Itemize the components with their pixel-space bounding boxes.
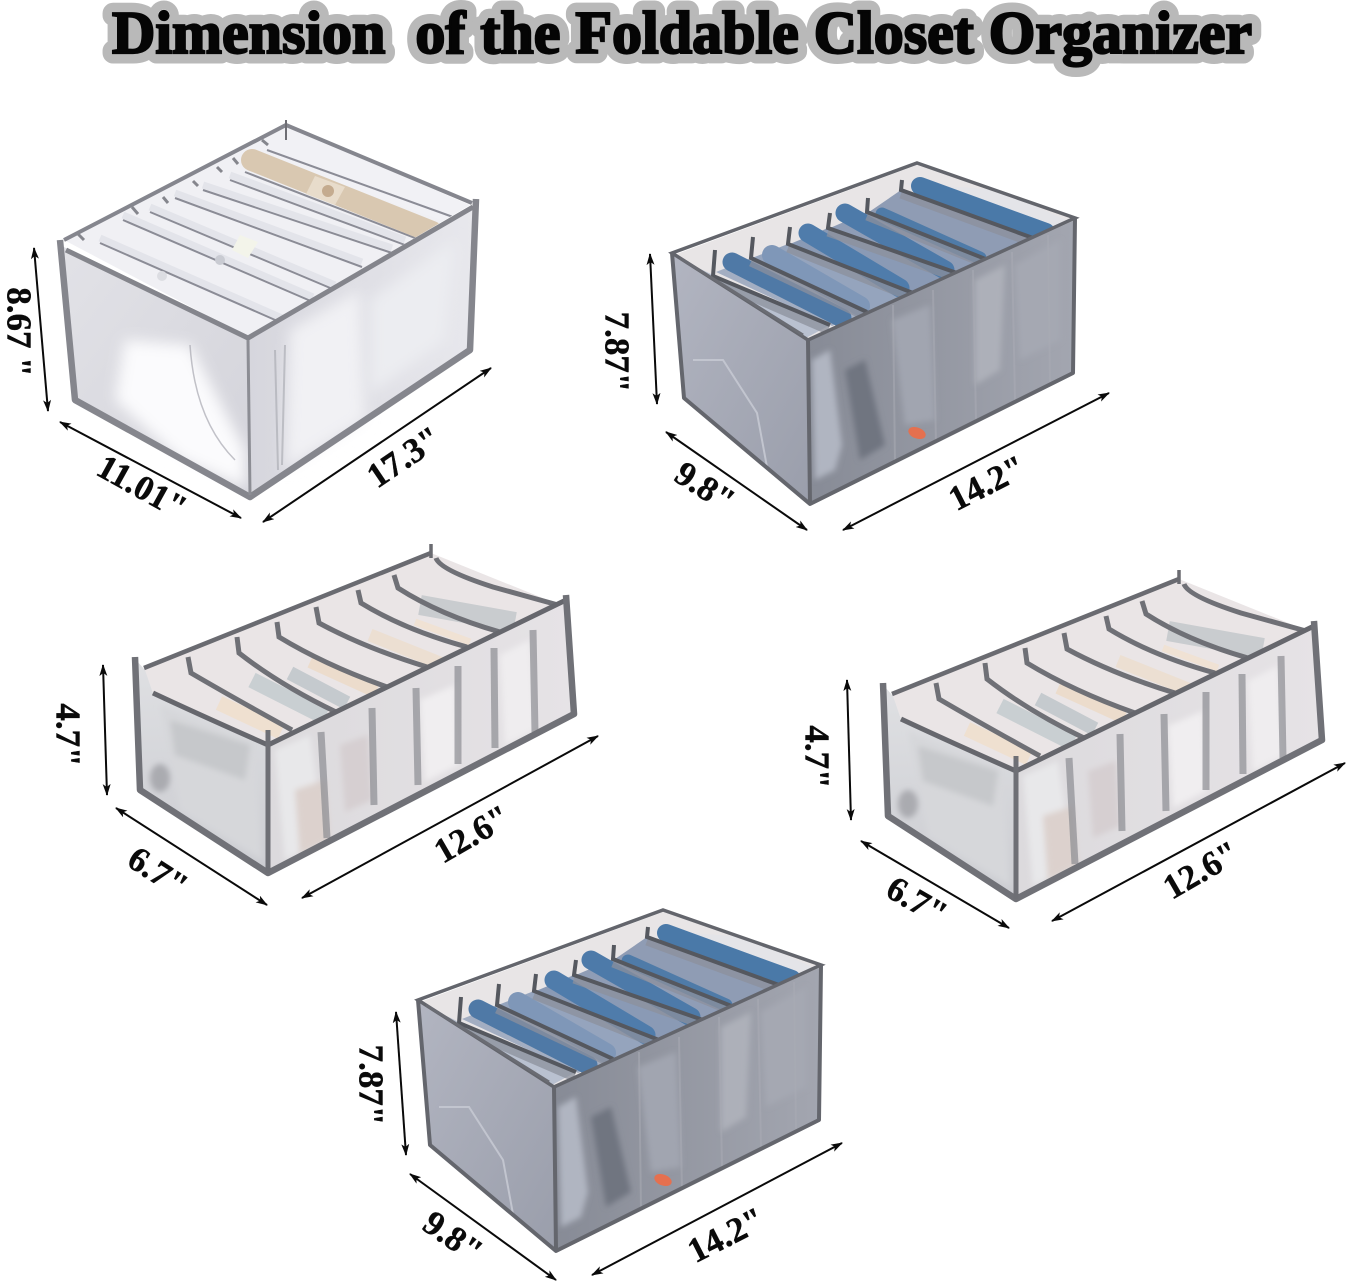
label: 12.6 inches: 12.6": [427, 797, 517, 871]
organizer illustration: folded underwear: [135, 544, 574, 873]
label: 6.7 inches: 6.7": [121, 838, 195, 906]
organizer illustration: white shirts: [60, 120, 476, 497]
arrow: length: [592, 1143, 842, 1275]
title: Dimension of the Foldable Closet Organizer: [112, 0, 1252, 66]
arrow: width: [410, 1174, 556, 1280]
shirt buttons and tags: [77, 140, 334, 281]
arrow: height: [34, 248, 48, 411]
label: 11.01 inches: 11.01": [90, 447, 194, 527]
label: 17.3 inches: 17.3": [360, 418, 448, 496]
panel: low organizer middle right: [798, 570, 1345, 934]
arrow: height: [650, 254, 657, 404]
arrow: width: [60, 422, 241, 518]
arrow: width: [861, 841, 1009, 928]
arrow: height: [103, 665, 107, 795]
panel: jeans organizer bottom center: [352, 910, 842, 1280]
label: 4.7 inches: 4.7": [798, 725, 836, 789]
label: 14.2 inches: 14.2": [681, 1199, 771, 1271]
label: 9.8 inches: 9.8": [668, 453, 742, 521]
arrow: length: [1052, 763, 1345, 921]
panel: low organizer middle left: [48, 544, 598, 906]
arrow: width: [116, 808, 267, 905]
title: Dimension of the Foldable Closet Organizer: [112, 0, 1252, 66]
label: 12.6 inches: 12.6": [1156, 833, 1246, 907]
arrow: height: [847, 680, 851, 820]
label: 7.87 inches: 7.87": [598, 312, 636, 392]
label: 4.7 inches: 4.7": [48, 703, 88, 767]
arrow: length: [843, 393, 1109, 530]
organizer illustration: jeans: [418, 910, 821, 1251]
panel: large white organizer: [0, 120, 491, 527]
arrow: length: [263, 368, 491, 522]
label: 7.87 inches: 7.87": [352, 1045, 390, 1125]
label: 9.8 inches: 9.8": [416, 1203, 490, 1271]
label: 8.67 inches: 8.67 ": [0, 287, 38, 377]
arrow: width: [666, 432, 807, 530]
arrow: length: [302, 736, 598, 898]
label: 14.2 inches: 14.2": [942, 447, 1032, 519]
panel: jeans organizer top right: [598, 163, 1109, 530]
label: 6.7 inches: 6.7": [880, 868, 954, 934]
arrow: height: [396, 1012, 406, 1155]
organizer illustration: jeans: [672, 163, 1075, 504]
organizer illustration: folded underwear: [883, 570, 1322, 899]
